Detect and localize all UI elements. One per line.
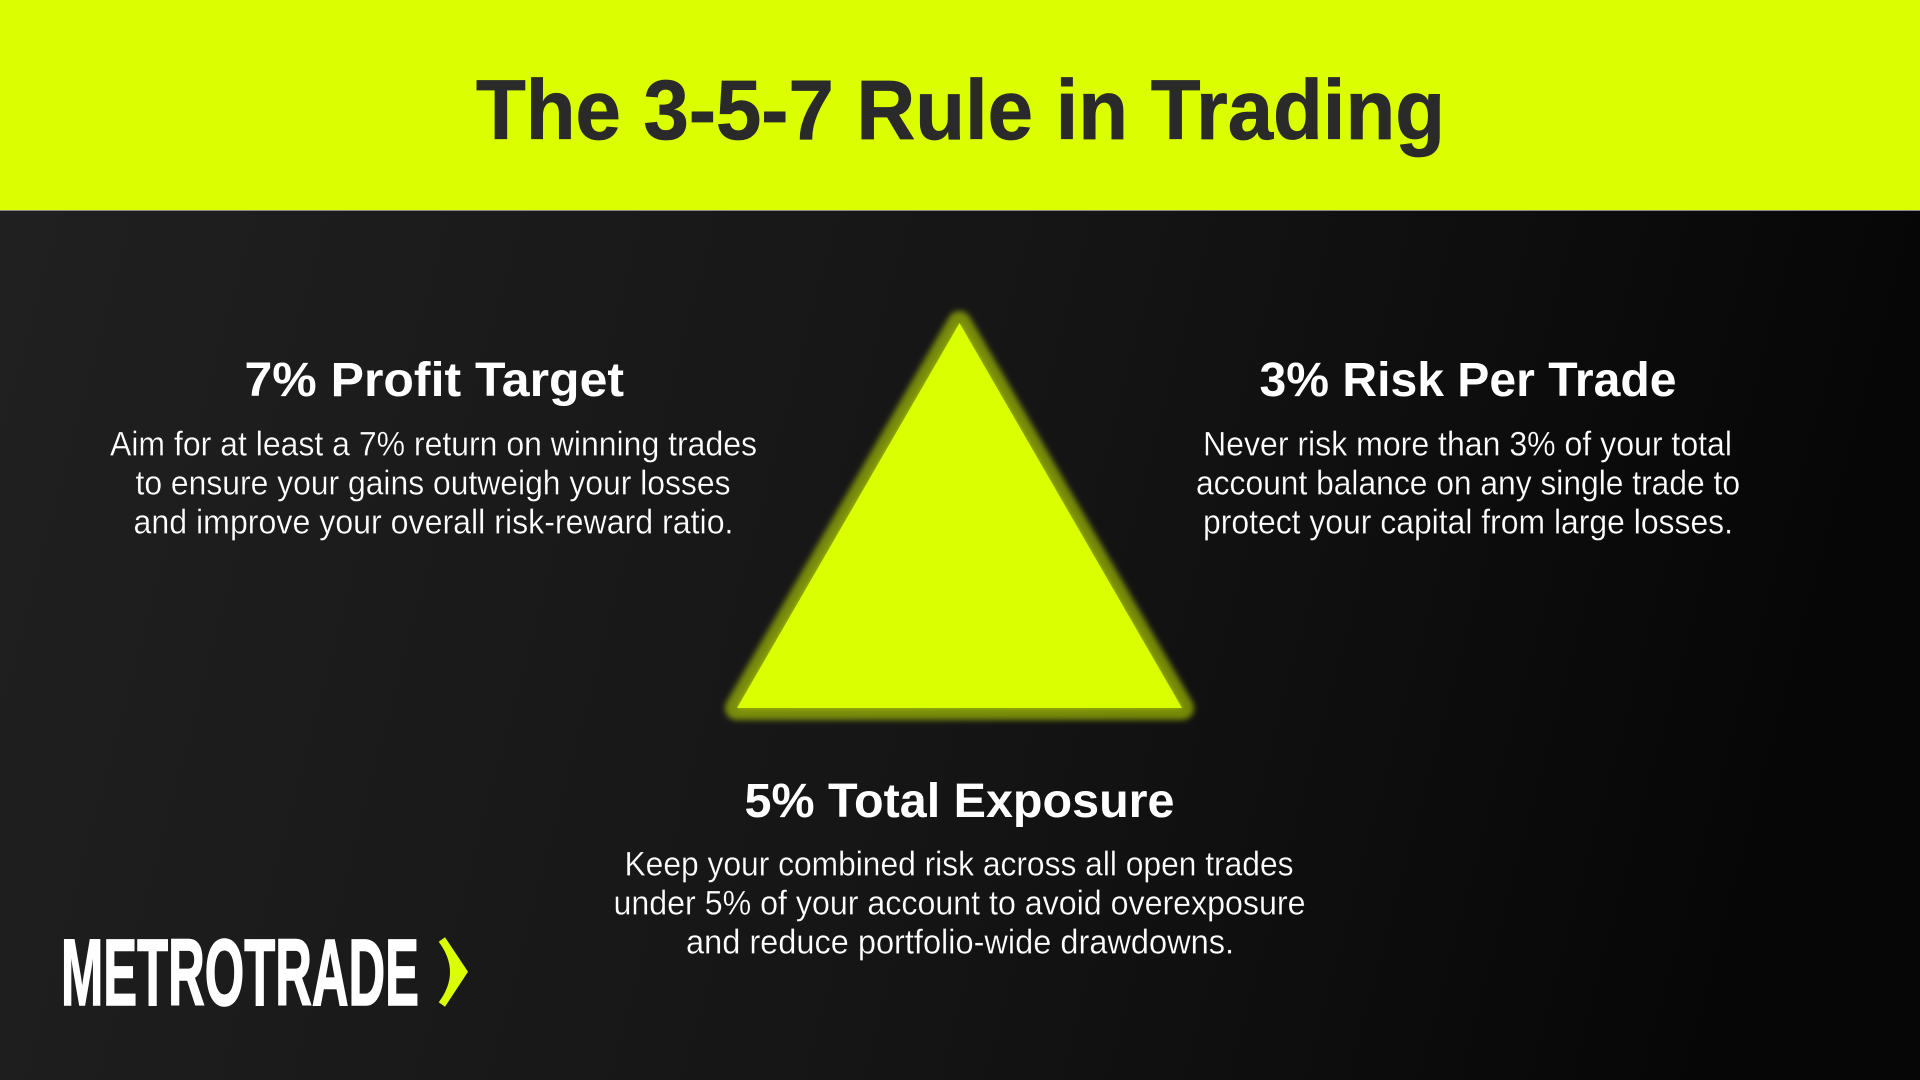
text block: risk per trade description: account balance on any single trade to bbox=[1196, 464, 1740, 502]
icon: glowing triangle bbox=[737, 323, 1182, 708]
header band bbox=[0, 0, 1920, 211]
logo wordmark: METROTRADE bbox=[61, 920, 419, 1026]
text block: profit target description: Aim for at least a 7% return on winning trades bbox=[110, 426, 757, 464]
heading: 3% risk per trade: 3% Risk Per Trade bbox=[1260, 354, 1676, 407]
icon: chevron bbox=[439, 937, 468, 1007]
text block: total exposure description: under 5% of your account to avoid overexposure bbox=[614, 884, 1306, 922]
heading: 7% profit target: 7% Profit Target bbox=[244, 354, 624, 407]
heading: 5% total exposure: 5% Total Exposure bbox=[744, 775, 1174, 828]
panel: 3% risk per trade bbox=[1196, 354, 1740, 542]
text block: total exposure description bbox=[614, 846, 1306, 962]
text block: total exposure description: Keep your combined risk across all open trades bbox=[624, 846, 1294, 884]
panel: 7% profit target bbox=[110, 354, 757, 542]
logo: metrotrade bbox=[61, 920, 468, 1026]
text block: total exposure description: and reduce portfolio-wide drawdowns. bbox=[686, 924, 1234, 962]
text block: risk per trade description: protect your capital from large losses. bbox=[1203, 504, 1733, 542]
title: The 3-5-7 Rule in Trading bbox=[476, 63, 1445, 157]
text block: profit target description: to ensure your gains outweigh your losses bbox=[136, 464, 730, 502]
text block: profit target description: and improve your overall risk-reward ratio. bbox=[134, 504, 734, 542]
panel: 5% total exposure bbox=[614, 775, 1306, 962]
text block: risk per trade description: Never risk more than 3% of your total bbox=[1203, 426, 1732, 464]
text block: risk per trade description bbox=[1196, 426, 1740, 542]
text block: profit target description bbox=[110, 426, 757, 542]
